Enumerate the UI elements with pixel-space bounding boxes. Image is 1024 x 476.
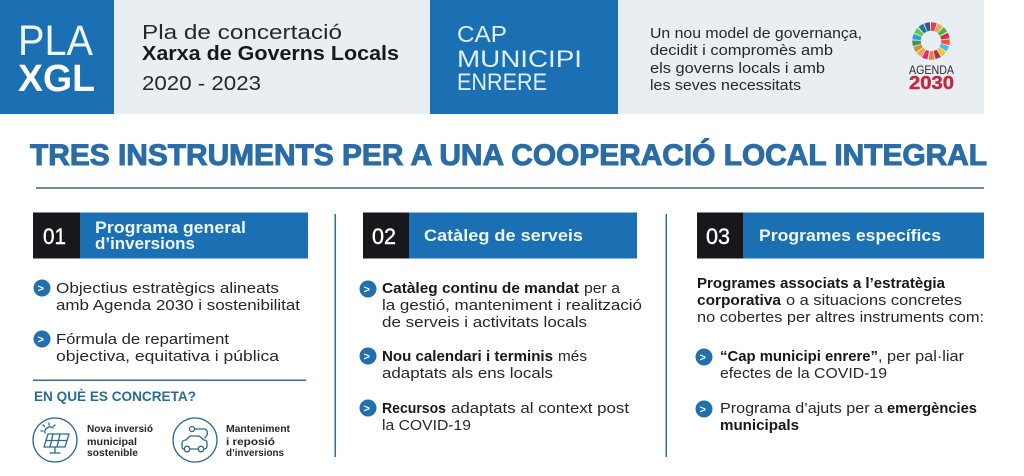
icon: Agenda 2030 logo: AGENDA (909, 65, 954, 77)
bullet: strategic objectives: > (38, 283, 44, 295)
bullet: continuous catalogue (360, 280, 642, 331)
heading 02 (363, 212, 637, 258)
bullet: distribution formula: > (38, 334, 44, 346)
bullet: new calendar: adaptats als ens locals (382, 365, 553, 382)
heading 02: 02 (372, 224, 396, 249)
header panel: plan title: 2020 - 2023 (142, 73, 261, 95)
intro text: o a situacions concretes (786, 292, 962, 309)
bullet: new calendar (360, 348, 587, 382)
label: new investment (87, 424, 153, 459)
bullet: emergency grants: > (700, 404, 706, 416)
logo block: PLA XGL: XGL (18, 58, 95, 100)
bullet: strategic objectives: Objectius estratègics alineats (56, 280, 279, 297)
logo block: PLA XGL: PLA (18, 17, 93, 65)
panel: 03 specific programmes (696, 212, 984, 434)
subheading: EN QUÈ ES CONCRETA? (34, 388, 196, 404)
heading 03 (697, 212, 984, 258)
header panel: slogan: CAP (457, 21, 507, 47)
bullet: emergency grants: Programa d’ajuts per a (720, 400, 884, 417)
bullet: continuous catalogue: Catàleg continu de mandat (382, 280, 579, 297)
bullet: continuous catalogue: la gestió, manteniment i realització (382, 297, 642, 314)
bullet: resources: > (364, 403, 370, 415)
label: maintenance (226, 424, 291, 459)
icon: solar panel (33, 418, 77, 462)
icon: Agenda 2030 logo (909, 21, 954, 93)
bullet: new calendar: més (558, 348, 587, 365)
bullet: resources: adaptats al context post (451, 400, 630, 417)
bullet: distribution formula: Fórmula de repartiment (56, 331, 230, 348)
bullet: new calendar: Nou calendari i terminis (382, 348, 553, 365)
header panel: governance statement: els governs locals i amb (650, 60, 825, 77)
header panel: plan title (114, 0, 430, 114)
label: new investment: Nova inversió (87, 424, 153, 435)
label: new investment: sostenible (87, 448, 138, 459)
heading 02: Catàleg de serveis (424, 227, 583, 245)
heading 01 (33, 212, 308, 258)
header panel: governance statement: decidit i compromès amb (650, 42, 833, 59)
heading 01: 01 (43, 224, 66, 249)
bullet: continuous catalogue: > (364, 284, 370, 296)
header panel: governance statement (618, 0, 984, 114)
intro text: no cobertes per altres instruments com: (697, 309, 984, 326)
bullet: strategic objectives (34, 280, 301, 314)
bullet: Cap municipi enrere: “Cap municipi enrere” (720, 348, 878, 365)
header panel: slogan (430, 0, 618, 114)
panel: 01 general investment programme (33, 212, 308, 462)
label: maintenance: Manteniment (226, 424, 291, 435)
bullet: resources: Recursos (382, 400, 446, 417)
bullet: distribution formula: objectiva, equitativa i pública (56, 348, 280, 365)
heading 01: d’inversions (95, 235, 195, 253)
intro text: corporativa (697, 292, 782, 309)
header panel: governance statement: Un nou model de governança, (650, 25, 862, 42)
bullet: emergency grants (696, 400, 977, 434)
intro text (697, 275, 984, 326)
header panel: plan title: Xarxa de Governs Locals (142, 43, 399, 65)
panel: 02 service catalogue (360, 212, 642, 434)
bullet: Cap municipi enrere (696, 348, 964, 382)
bullet: emergency grants: municipals (720, 417, 799, 434)
label: new investment: municipal (87, 437, 137, 448)
heading 01: Programa general (95, 219, 246, 237)
heading 03: 03 (706, 224, 730, 249)
icon: car maintenance (173, 418, 217, 462)
bullet: strategic objectives: amb Agenda 2030 i sostenibilitat (56, 297, 301, 314)
icon: Agenda 2030 logo: 2030 (909, 73, 954, 93)
header panel: slogan: ENRERE (457, 69, 547, 96)
bullet: continuous catalogue: per a (584, 280, 621, 297)
header panel: governance statement: les seves necessitats (650, 77, 801, 94)
bullet: Cap municipi enrere: > (700, 352, 706, 364)
bullet: distribution formula (34, 330, 280, 365)
bullet: resources (360, 400, 630, 434)
bullet: new calendar: > (364, 351, 370, 363)
label: maintenance: i reposió (226, 437, 275, 448)
main title: TRES INSTRUMENTS PER A UNA COOPERACIÓ LOCAL INTEGRAL (30, 138, 987, 172)
bullet: resources: la COVID-19 (382, 417, 471, 434)
logo block: PLA XGL (0, 0, 114, 114)
header panel: slogan: MUNICIPI (457, 46, 582, 73)
bullet: emergency grants: emergències (887, 400, 977, 417)
intro text: Programes associats a l’estratègia (697, 275, 946, 292)
bullet: Cap municipi enrere: efectes de la COVID-19 (720, 365, 887, 382)
label: maintenance: d’inversions (226, 448, 284, 459)
bullet: Cap municipi enrere: , per pal·liar (878, 348, 964, 365)
bullet: continuous catalogue: de serveis i activitats locals (382, 314, 587, 331)
header panel: plan title: Pla de concertació (142, 22, 342, 44)
heading 03: Programes específics (759, 227, 941, 245)
